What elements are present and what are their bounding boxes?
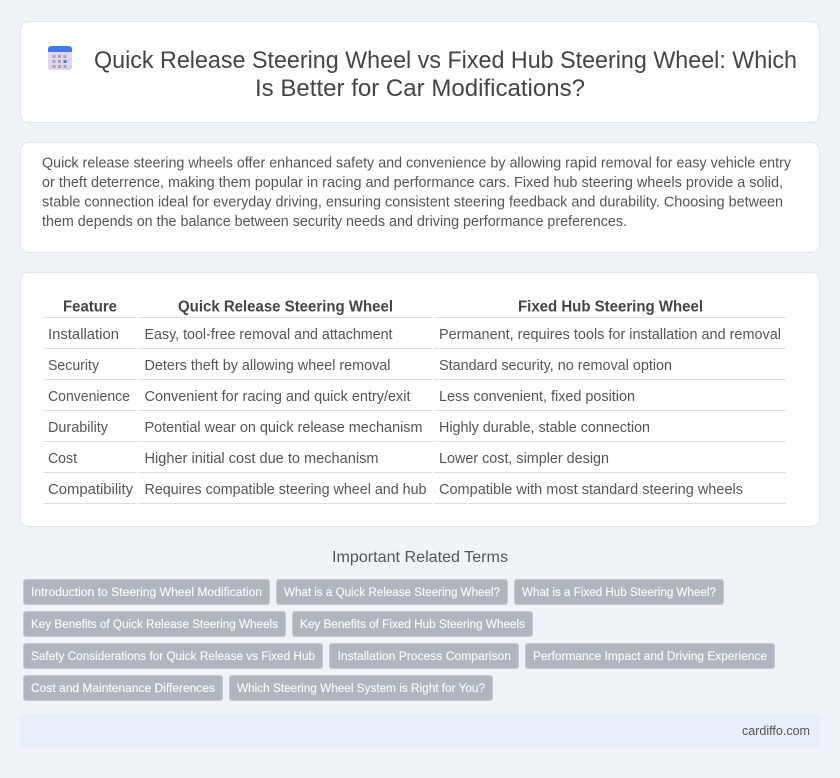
table header: Fixed Hub Steering Wheel <box>518 298 703 316</box>
text block: introduction: stable connection ideal for everyday driving, ensuring consistent steering feedback and durability. Choosing between <box>42 194 783 210</box>
tag <box>526 644 774 668</box>
icon: calendar <box>48 46 72 70</box>
tag <box>24 580 270 604</box>
tag: Cost and Maintenance Differences <box>31 681 215 695</box>
panel: related term tags <box>24 580 774 700</box>
tag <box>276 580 508 604</box>
table row: convenience <box>48 389 635 405</box>
text block: introduction: them depends on the balance between security needs and driving performance preferences. <box>42 214 627 230</box>
text block: introduction: Quick release steering wheels offer enhanced safety and convenience by allowing rapid removal for easy vehicle entry <box>42 156 792 172</box>
table row: cost: Lower cost, simpler design <box>439 451 609 467</box>
table row: compatibility <box>48 482 743 498</box>
tag <box>24 676 222 700</box>
tag: What is a Fixed Hub Steering Wheel? <box>522 585 716 599</box>
tag: Installation Process Comparison <box>338 649 511 663</box>
table row: cost: Cost <box>48 451 77 467</box>
panel: comparison table <box>20 272 820 526</box>
table row: installation <box>48 327 781 343</box>
table row: cost: Higher initial cost due to mechanism <box>144 451 378 467</box>
tag <box>514 580 724 604</box>
table row: compatibility: Compatible with most standard steering wheels <box>439 482 743 498</box>
tag: Performance Impact and Driving Experience <box>533 649 767 663</box>
tag <box>24 644 322 668</box>
table row: convenience: Convenience <box>48 389 130 405</box>
table header: Feature <box>63 298 117 316</box>
table row: durability: Durability <box>48 420 109 436</box>
text block: introduction <box>42 156 792 230</box>
tag <box>230 676 492 700</box>
title <box>94 47 797 102</box>
tag: Which Steering Wheel System is Right for You? <box>237 681 485 695</box>
table row: durability: Potential wear on quick release mechanism <box>144 420 423 436</box>
table row: security: Standard security, no removal option <box>439 358 672 374</box>
footer <box>20 714 820 748</box>
table row: installation: Installation <box>48 327 119 343</box>
title: Quick Release Steering Wheel vs Fixed Hub Steering Wheel: Which <box>94 47 797 74</box>
table row: security: Deters theft by allowing wheel removal <box>144 358 390 374</box>
tag: Introduction to Steering Wheel Modification <box>31 585 262 599</box>
table header <box>63 298 703 316</box>
title: Is Better for Car Modifications? <box>255 75 585 102</box>
tag <box>330 644 518 668</box>
table row: durability: Highly durable, stable connection <box>439 420 650 436</box>
panel: introduction <box>20 142 820 252</box>
tag: Key Benefits of Fixed Hub Steering Wheels <box>300 617 525 631</box>
table header: Quick Release Steering Wheel <box>178 298 393 316</box>
tag: Key Benefits of Quick Release Steering Wheels <box>31 617 278 631</box>
table row: security <box>48 358 672 374</box>
tag <box>24 612 286 636</box>
table row: convenience: Less convenient, fixed position <box>439 389 635 405</box>
tag: What is a Quick Release Steering Wheel? <box>284 585 500 599</box>
heading: important related terms: Important Related Terms <box>332 549 508 566</box>
table row: installation: Permanent, requires tools for installation and removal <box>439 327 781 343</box>
panel: header <box>20 22 820 122</box>
table row: security: Security <box>48 358 100 374</box>
table row: compatibility: Compatibility <box>48 482 134 498</box>
table row: cost <box>48 451 609 467</box>
table row: convenience: Convenient for racing and quick entry/exit <box>144 389 410 405</box>
footer: source: cardiffo.com <box>742 724 810 738</box>
table row: installation: Easy, tool-free removal and attachment <box>144 327 393 343</box>
tag <box>292 612 532 636</box>
table row: durability <box>48 420 650 436</box>
table row: compatibility: Requires compatible steering wheel and hub <box>144 482 426 498</box>
text block: introduction: or theft deterrence, making them popular in racing and performance cars. Fixed hub steering wheels provide a solid, <box>42 175 783 191</box>
tag: Safety Considerations for Quick Release vs Fixed Hub <box>31 649 315 663</box>
